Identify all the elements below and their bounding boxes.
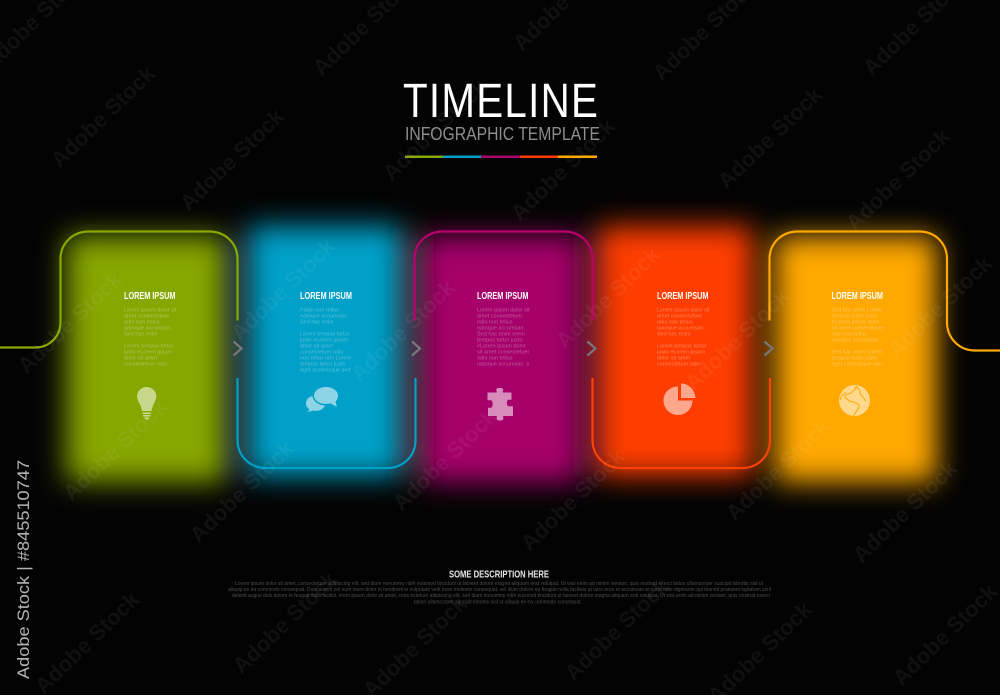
heading: LOREM IPSUM [477, 291, 528, 302]
heading: LOREM IPSUM [300, 291, 352, 302]
body text: Lorem ipsum dolor sit [124, 308, 177, 314]
timeline connector: blue [238, 378, 416, 468]
timeline connector: magenta [414, 232, 592, 320]
watermark pattern: Adobe Stock [721, 413, 835, 525]
watermark pattern: Adobe Stock [560, 573, 674, 685]
watermark pattern: Adobe Stock [226, 233, 340, 345]
body text: consectetuer odio [124, 362, 167, 368]
timeline connector: green [0, 232, 238, 348]
body text: Lorem ipsum dolor sit [477, 308, 530, 314]
watermark pattern: Adobe Stock [841, 123, 955, 235]
body text [123, 308, 177, 368]
body text: Sed hac enim orem [477, 332, 525, 338]
body text: amet consectetuer [477, 314, 522, 320]
watermark pattern: Adobe Stock [516, 443, 630, 555]
body text: Lorem ipsum dolor sit [657, 308, 710, 314]
body text: Lorem tempus tortor [124, 344, 174, 350]
body text: eLorem ipsum dolor [477, 344, 526, 350]
body text: justo eLorem ipsum [656, 350, 705, 356]
arrow 4 [764, 342, 772, 356]
body text: odio non tellus [832, 332, 867, 338]
body text: odio non tellus [657, 320, 693, 326]
body text: consectetuer odio [657, 362, 700, 368]
body text: Sed hac enim [657, 332, 691, 338]
description block [228, 570, 771, 606]
body text: dolor sit amet [300, 344, 333, 350]
watermark pattern: Adobe Stock [713, 81, 827, 193]
body text: eLorem ipsum dolor [832, 320, 880, 326]
watermark pattern: Adobe Stock [30, 586, 144, 695]
body text [477, 308, 530, 368]
icon: puzzle piece [488, 388, 513, 421]
body text: eget scelerisque sed [832, 362, 882, 368]
body text: consectetuer odio [300, 350, 343, 356]
watermark pattern: Adobe Stock [888, 578, 1000, 690]
body text: natoque accumsan. [300, 314, 348, 320]
description text [228, 581, 771, 606]
body text: natoque accumsan. [477, 326, 525, 332]
body text: amet consectetuer [657, 314, 702, 320]
body text: amet consectetuer [124, 314, 169, 320]
body text: tempus tortor justo [300, 362, 346, 368]
icon: pie chart [664, 384, 696, 415]
panel: step 4 orange [656, 291, 710, 415]
watermark pattern: Adobe Stock [13, 266, 127, 378]
body text: tempus tortor justo [832, 356, 877, 362]
body text: tempus tortor justo [832, 314, 877, 320]
arrow 3 [588, 342, 596, 356]
body text: Fodio non tellus [300, 308, 339, 314]
body text: odio non tellus [477, 356, 513, 362]
body text: Sed hac enim [300, 320, 334, 326]
timeline connector: yellow [770, 232, 1000, 350]
body text: natoque accumsan. [657, 326, 705, 332]
watermark pattern: Adobe Stock [388, 403, 502, 515]
body text: Lorem tempus tortor [300, 332, 350, 338]
heading: LOREM IPSUM [657, 291, 708, 302]
watermark pattern: Adobe Stock [185, 435, 299, 547]
body text: non tellus nim Lorem [300, 356, 351, 362]
heading: LOREM IPSUM [832, 291, 883, 302]
body text: odio non tellus [124, 320, 160, 326]
heading: LOREM IPSUM [124, 291, 176, 302]
panel: step 2 blue [299, 291, 352, 412]
icon: globe [839, 385, 870, 416]
watermark pattern: Adobe Stock [551, 241, 665, 353]
body text: natoque accumsan. [832, 338, 880, 344]
body text: Lorem tempus tortor [657, 344, 707, 350]
description text: Lorem ipsum dolor sit amet, consectetuer adipiscing elit, sed diam nonummy nibh euismod tincidunt ut laoreet dolore magna aliquam erat volutpat. Ut wisi enim ad minim veniam, quis nostrud exerci tation ullamcorper suscipit lobortis nisl ut [235, 581, 763, 587]
watermark pattern: Adobe Stock [378, 73, 492, 185]
body text [656, 308, 710, 368]
arrow 2 [412, 342, 420, 356]
body text: Sed hac enim Lorem [832, 350, 883, 356]
body text: justo eLorem ipsum [299, 338, 348, 344]
watermark pattern: Adobe Stock [175, 103, 289, 215]
stock id label: Adobe Stock | #845510747 [14, 460, 33, 679]
glowing card backgrounds [66, 226, 937, 482]
body text: sit amet consectetuer [832, 326, 884, 332]
body text: Sed hac enim Lorem [832, 308, 883, 314]
body text [832, 308, 884, 368]
watermark pattern: Adobe Stock [680, 283, 794, 395]
body text [299, 308, 351, 374]
body text: dolor sit amet [124, 356, 157, 362]
body text: natoque accumsan. s [477, 362, 530, 368]
title block [403, 75, 600, 158]
panel: step 1 green [123, 291, 177, 420]
arrow 1 [234, 342, 242, 356]
subtitle: INFOGRAPHIC TEMPLATE [405, 124, 600, 144]
description text: aliquip ex ea commodo consequat. Duis autem vel eum iriure dolor in hendrerit in vulputate velit esse molestie consequat, vel illum dolore eu feugiat nulla facilisis at vero eros et accumsan et iusto odio dignissim qui blandit praesent luptatum zzril [228, 587, 771, 593]
body text: odio non tellus [477, 320, 513, 326]
body text: tempus tortor justo [477, 338, 523, 344]
watermark pattern: Adobe Stock [46, 60, 160, 172]
body text: sit amet consectetuer [477, 350, 529, 356]
watermark pattern: Adobe Stock [506, 113, 620, 225]
timeline connector: orange [592, 378, 770, 468]
icon: speech bubbles [306, 387, 338, 412]
body text: natoque accumsan. [124, 326, 172, 332]
description text: tation ullamcorper suscipit lobortis nisl ut aliquip ex ea commodo consequat. [414, 600, 582, 606]
watermark pattern: Adobe Stock [346, 274, 460, 386]
watermark pattern: Adobe Stock [848, 455, 962, 567]
body text: dolor sit amet [657, 356, 690, 362]
body text: eget scelerisque sed [300, 368, 350, 374]
watermark pattern: Adobe Stock [883, 250, 997, 362]
panel: step 5 yellow [832, 291, 884, 416]
description text: delenit augue duis dolore te feugait nulla facilisi. orem ipsum dolor sit amet, cons ectetuer adipiscing elit, sed diam nonummy nibh euismod tincidunt ut laoreet dolore magna aliquam erat volutpat. Ut wisi enim ad minim veniam, quis nostrud exerci [232, 593, 770, 599]
icon: light bulb [137, 387, 156, 420]
body text: Sed hac enim [124, 332, 158, 338]
colour underline [405, 156, 597, 158]
watermark pattern: Adobe Stock [228, 566, 342, 678]
body text: justo eLorem ipsum [123, 350, 172, 356]
watermark pattern: Adobe Stock [58, 393, 172, 505]
panel: step 3 magenta [477, 291, 530, 421]
description heading: SOME DESCRIPTION HERE [449, 570, 549, 580]
title: TIMELINE [403, 75, 598, 128]
